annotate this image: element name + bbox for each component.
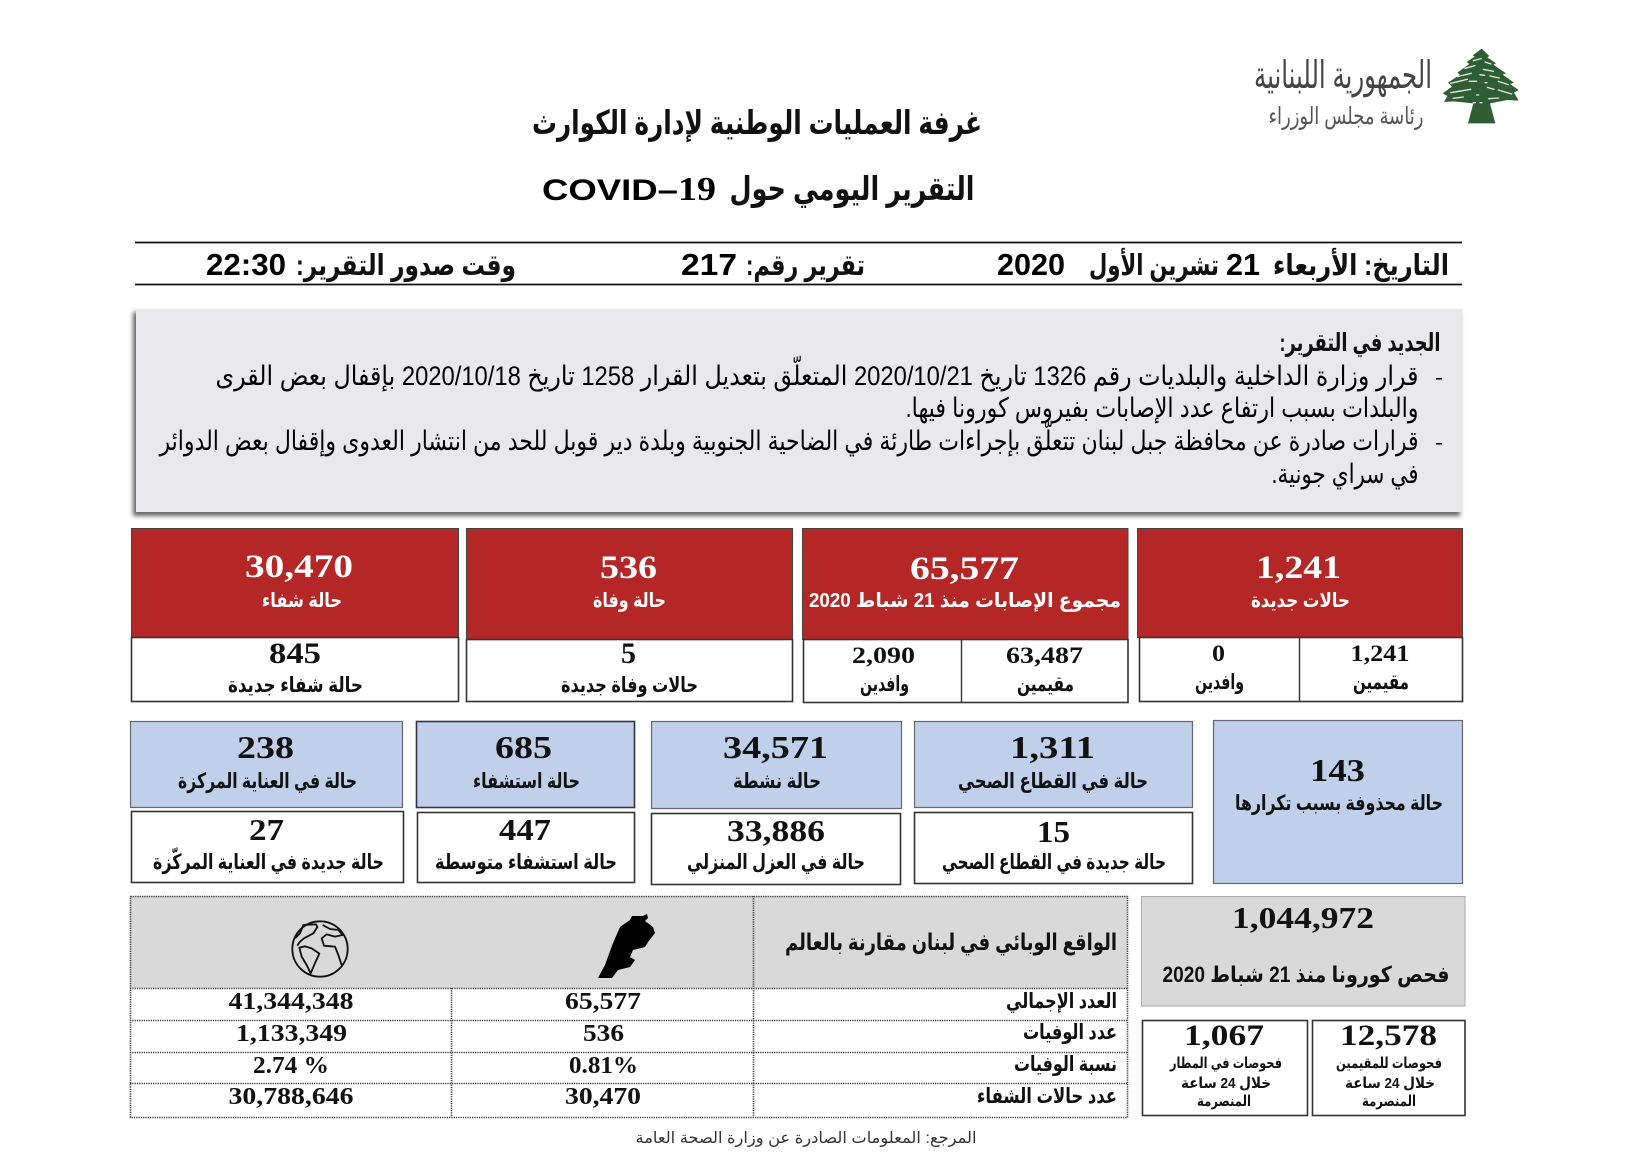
label: health sector: حالة في القطاع الصحي	[958, 770, 1148, 793]
bullet 1: والبلدات بسبب ارتفاع عدد الإصابات بفيروس كورونا فيها.	[906, 393, 1418, 424]
new recoveries: 845	[269, 637, 321, 670]
report time: وقت صدور التقرير:	[296, 250, 516, 282]
label: airport tests	[1169, 1055, 1282, 1110]
label: total infections since 21 February 2020: مجموع الإصابات منذ 21 شباط 2020	[809, 590, 1121, 612]
label: residents: مقيمين	[1353, 671, 1409, 694]
panel heading: الجديد في التقرير:	[1280, 329, 1440, 358]
label: arrivals: وافدين	[1195, 671, 1244, 694]
report number: 217	[681, 248, 737, 282]
table heading: الواقع الوبائي في لبنان مقارنة بالعالم	[785, 929, 1117, 956]
row: total: 41,344,348	[228, 989, 354, 1015]
report date: 21	[1226, 248, 1260, 282]
label: home isolation: حالة في العزل المنزلي	[687, 851, 865, 874]
airport tests number: 1,067	[1184, 1019, 1264, 1052]
report number: تقرير رقم:	[746, 250, 865, 282]
report info bar	[135, 242, 1462, 284]
hospital number: 685	[495, 729, 552, 765]
new deaths: 5	[621, 637, 636, 670]
new ICU: 27	[249, 812, 284, 847]
card: new cases	[1138, 528, 1462, 702]
row: total: العدد الإجمالي	[1006, 990, 1117, 1013]
icon: Lebanon map	[598, 914, 655, 978]
total tests number: 1,044,972	[1232, 900, 1374, 935]
bullet 2: في سراي جونية.	[1272, 459, 1418, 490]
label: removed duplicates: حالة محذوفة بسبب تكرارها	[1235, 792, 1443, 815]
row: deaths	[236, 1021, 1117, 1047]
new health sector number: 15	[1037, 814, 1070, 849]
icon: globe	[292, 921, 348, 977]
total deaths: 536	[600, 550, 657, 586]
label: new recoveries: حالة شفاء جديدة	[228, 674, 363, 697]
new residents: 1,241	[1350, 641, 1410, 666]
report date: تشرين الأول	[1089, 247, 1219, 282]
label: active cases: حالة نشطة	[733, 770, 821, 793]
label: resident tests: خلال 24 ساعة	[1345, 1075, 1435, 1092]
table: Lebanon vs world	[130, 896, 1128, 1118]
duplicates number: 143	[1310, 752, 1365, 788]
row: total	[228, 989, 1117, 1015]
logo calligraphy text	[1254, 55, 1432, 130]
bullet 1	[216, 355, 1442, 424]
active number: 34,571	[723, 729, 828, 765]
card: total infections	[802, 528, 1128, 703]
report time: 22:30	[206, 248, 286, 282]
report date: 2020	[997, 248, 1065, 282]
row: death rate	[253, 1053, 1117, 1079]
panel: total tests	[1142, 896, 1465, 1006]
label: airport tests: المنصرمة	[1197, 1093, 1251, 1110]
label: new deaths: حالات وفاة جديدة	[561, 674, 698, 697]
card: recoveries	[132, 528, 458, 702]
report number	[681, 248, 865, 282]
ICU number: 238	[237, 729, 294, 765]
row: recoveries: 30,788,646	[228, 1084, 354, 1110]
logo calligraphy text: الجمهورية اللبنانية	[1254, 55, 1432, 98]
source footnote: المرجع: المعلومات الصادرة عن وزارة الصحة العامة	[636, 1130, 976, 1148]
health sector number: 1,311	[1010, 729, 1095, 765]
label: deaths: حالة وفاة	[593, 590, 666, 612]
arrivals total: 2,090	[852, 643, 915, 668]
label: new cases: حالات جديدة	[1251, 590, 1350, 612]
label: arrivals: وافدين	[860, 673, 909, 696]
label: new ICU: حالة جديدة في العناية المركّزة	[153, 846, 384, 874]
label: residents: مقيمين	[1017, 673, 1074, 696]
total infections number: 65,577	[910, 551, 1019, 587]
report date: التاريخ: الأربعاء	[1273, 247, 1449, 282]
logo: Lebanese presidency of council of ministers	[1254, 49, 1519, 130]
label: resident tests	[1336, 1055, 1442, 1110]
row: total: 65,577	[565, 989, 641, 1015]
new cases number: 1,241	[1256, 550, 1341, 586]
row: recoveries: 30,470	[565, 1084, 641, 1110]
resident tests number: 12,578	[1340, 1019, 1437, 1052]
row: recoveries: عدد حالات الشفاء	[977, 1085, 1117, 1108]
card: deaths	[466, 528, 792, 702]
bullet 2	[158, 420, 1442, 490]
title line 2: التقرير اليومي حول	[730, 170, 974, 209]
new arrivals: 0	[1212, 641, 1225, 666]
row: death rate: 0.81%	[569, 1053, 638, 1079]
label: airport tests: خلال 24 ساعة	[1181, 1075, 1271, 1092]
title line 2	[542, 170, 974, 209]
title line 2: 19	[678, 171, 716, 208]
label: resident tests: المنصرمة	[1362, 1093, 1416, 1110]
row: deaths: 1,133,349	[236, 1021, 347, 1047]
label: ICU cases: حالة في العناية المركزة	[178, 770, 357, 793]
card: health sector	[914, 722, 1192, 884]
bullet 1: قرار وزارة الداخلية والبلديات رقم 1326 تاريخ 2020/10/21 المتعلّق بتعديل القرار 1258 تاريخ 2020/10/18 بإقفال بعض القرى	[216, 355, 1419, 392]
box: airport tests	[1142, 1019, 1308, 1116]
label: tests since 21 February 2020: فحص كورونا منذ 21 شباط 2020	[1162, 962, 1450, 988]
card: removed duplicates	[1214, 720, 1462, 884]
card: hospitalised	[416, 722, 634, 882]
card: ICU	[130, 722, 404, 882]
logo calligraphy text: رئاسة مجلس الوزراء	[1268, 103, 1424, 130]
row: recoveries	[228, 1084, 1117, 1110]
title	[532, 104, 982, 209]
box: resident tests	[1312, 1019, 1465, 1116]
label: hospitalised: حالة استشفاء	[473, 770, 580, 793]
label: resident tests: فحوصات للمقيمين	[1336, 1055, 1442, 1072]
total recoveries: 30,470	[245, 549, 353, 585]
home isolation number: 33,886	[727, 813, 825, 848]
row: deaths: عدد الوفيات	[1023, 1021, 1117, 1044]
title line 1: غرفة العمليات الوطنية لإدارة الكوارث	[532, 104, 982, 143]
icon: cedar tree	[1443, 49, 1519, 123]
label: new health sector: حالة جديدة في القطاع الصحي	[942, 851, 1166, 874]
label: moderate hospitalised: حالة استشفاء متوسطة	[435, 851, 617, 874]
card: active	[652, 722, 902, 884]
residents total: 63,487	[1006, 643, 1083, 668]
report date	[997, 247, 1449, 282]
label: recovered cases: حالة شفاء	[262, 590, 342, 612]
title line 2: COVID–	[542, 174, 678, 207]
label: airport tests: فحوصات في المطار	[1169, 1055, 1282, 1072]
report time	[206, 248, 516, 282]
row: death rate: 2.74 %	[253, 1053, 329, 1079]
row: death rate: نسبة الوفيات	[1014, 1053, 1117, 1076]
row: deaths: 536	[583, 1021, 624, 1047]
panel: what's new in the report	[133, 309, 1462, 516]
moderate number: 447	[499, 812, 551, 847]
